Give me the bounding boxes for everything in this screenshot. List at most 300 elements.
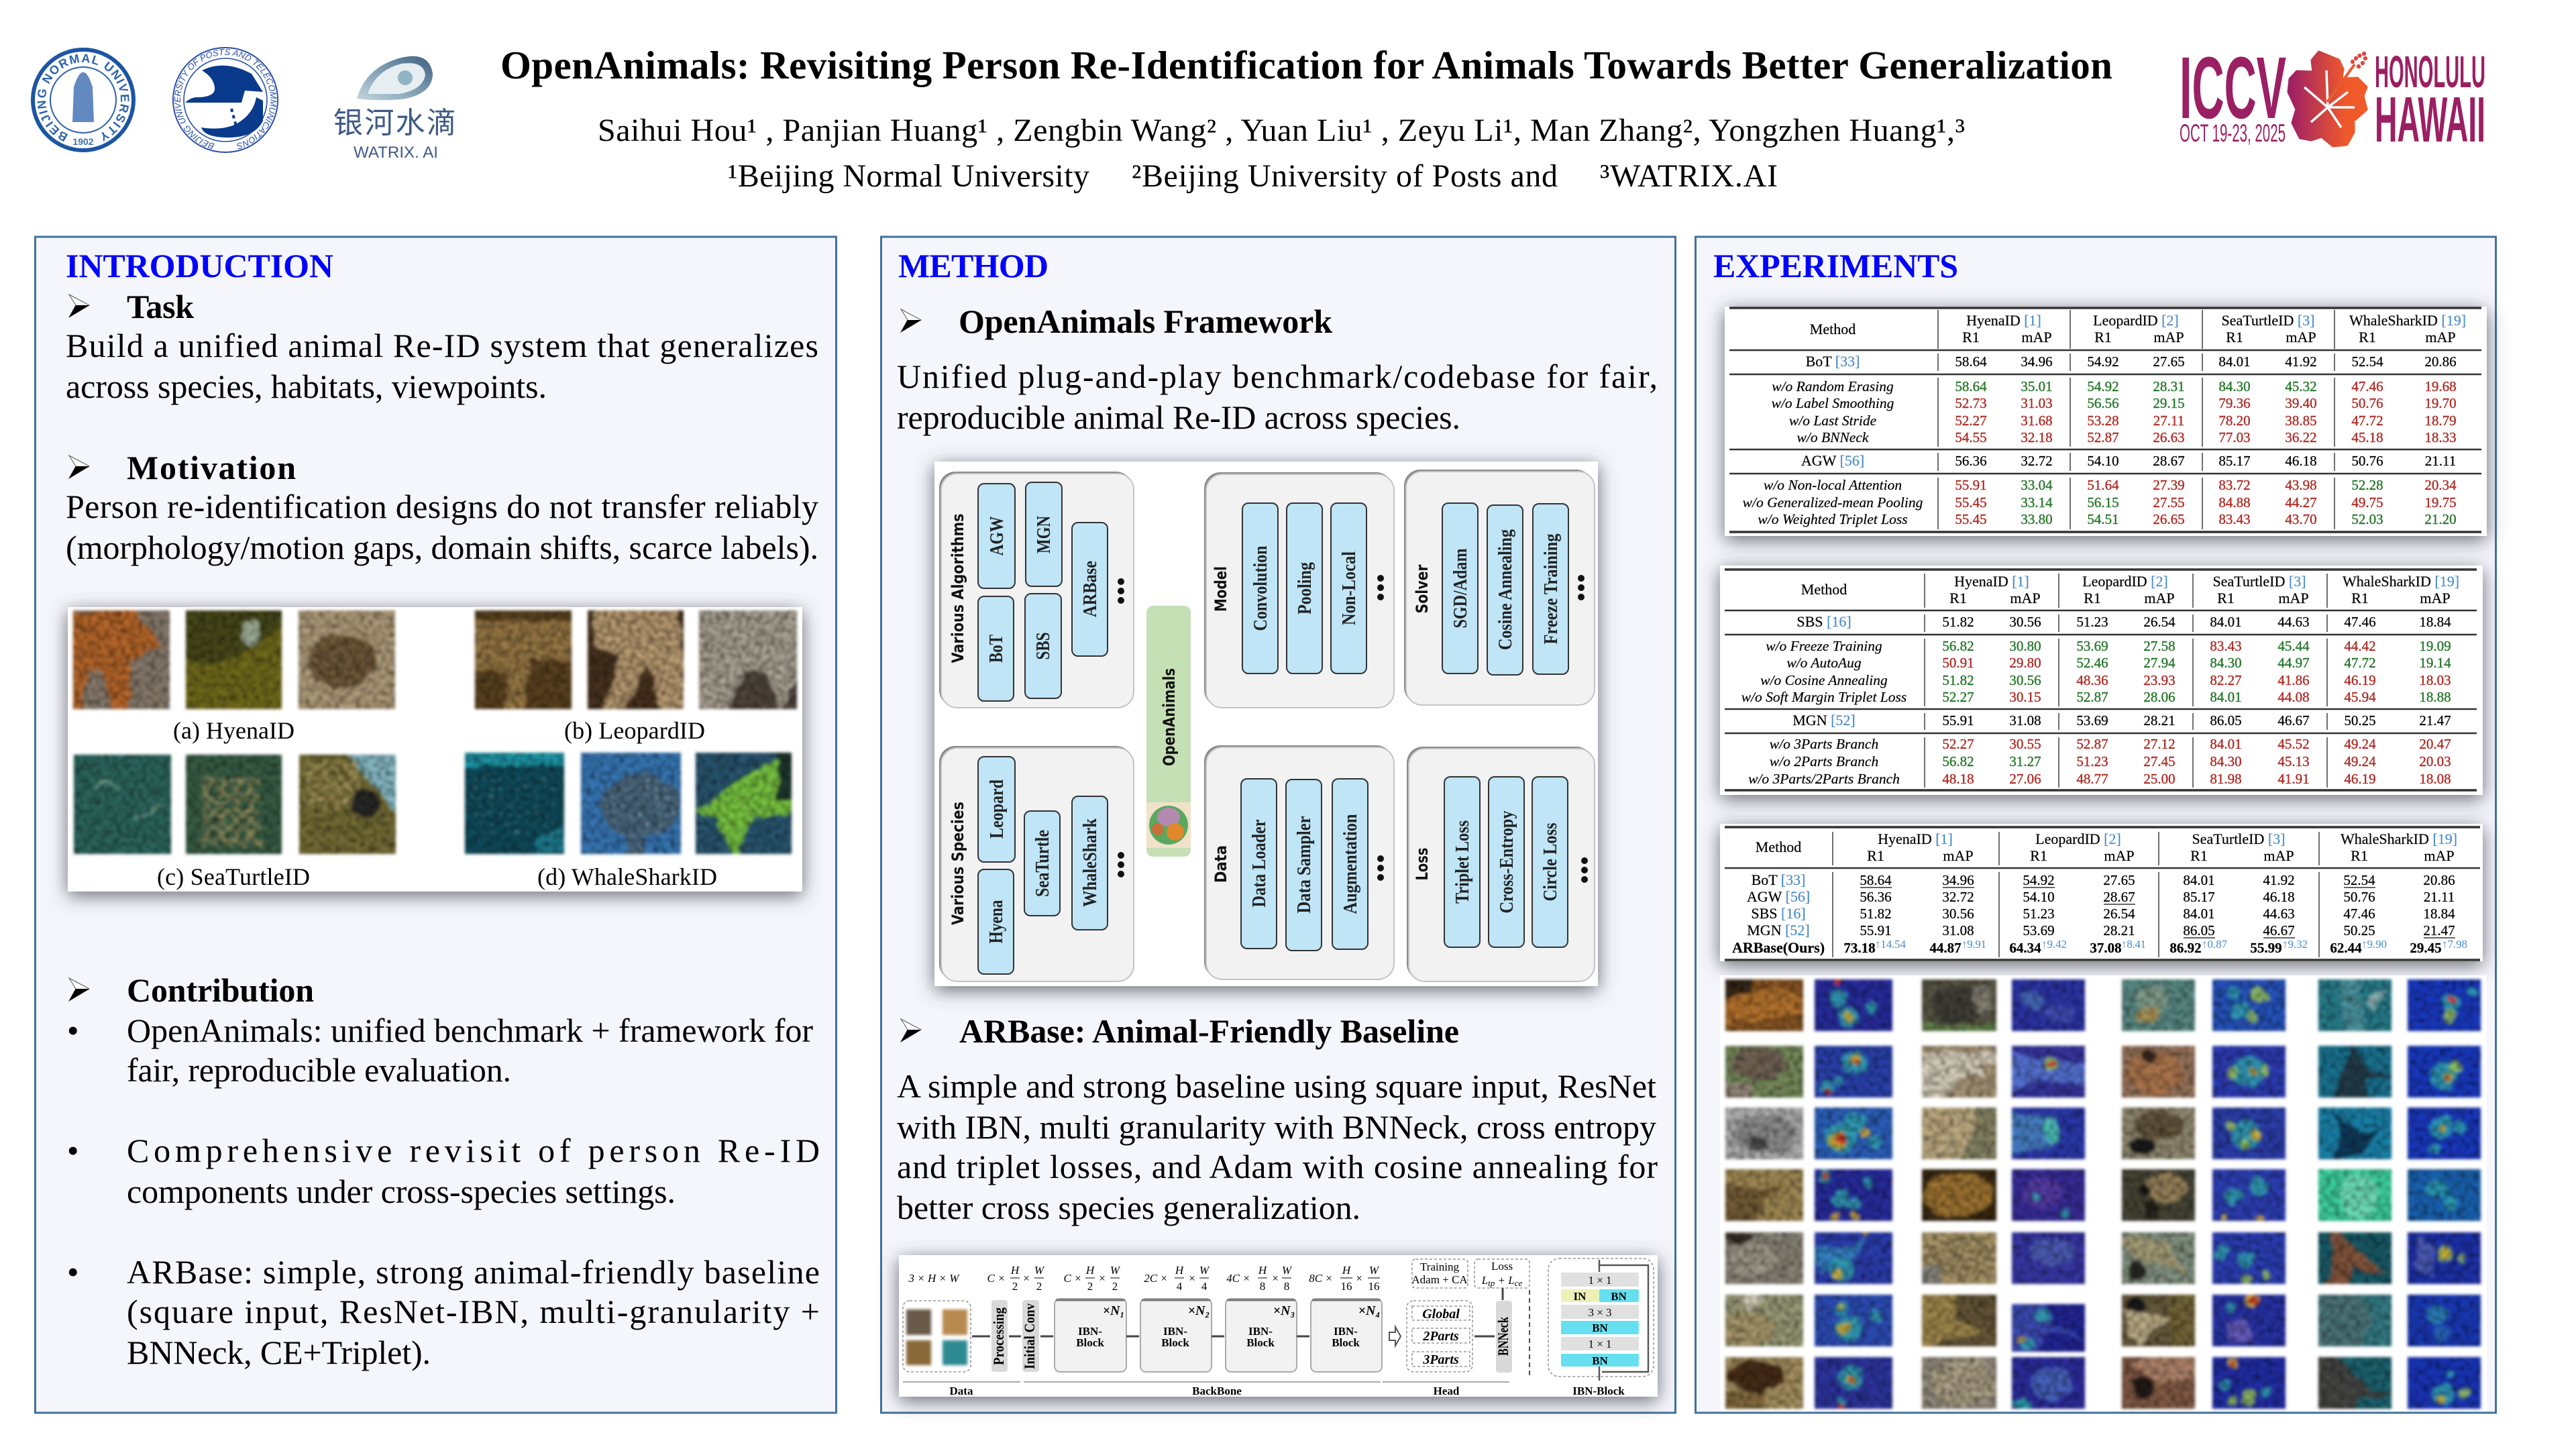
table: bot and agw ablation: 34.96 [2021, 354, 2053, 370]
training and loss boxes [1411, 1259, 1529, 1288]
table: bot and agw ablation: 55.91 [1955, 477, 1987, 493]
table: comparison with arbase: 73.18 [1843, 940, 1876, 956]
group: data: Data [1212, 845, 1230, 883]
table: sbs and mgn ablation: 49.24 [2344, 736, 2376, 752]
hyena samples [67, 604, 400, 714]
table: bot and agw ablation: 19.70 [2424, 395, 2457, 411]
table: sbs and mgn ablation: 53.69 [2076, 712, 2108, 729]
table: bot and agw ablation: 43.98 [2285, 477, 2317, 493]
subsection: contribution: BNNeck, CE+Triplet). [127, 1334, 431, 1371]
table: comparison with arbase [1720, 824, 2483, 961]
table: comparison with arbase: 46.67 [2263, 922, 2295, 938]
section labels: Head [1434, 1385, 1460, 1397]
table: bot and agw ablation: 52.54 [2351, 354, 2383, 370]
table: bot and agw ablation: 85.17 [2218, 453, 2251, 469]
table: bot and agw ablation: 35.01 [2021, 378, 2053, 394]
table: sbs and mgn ablation: 50.91 [1942, 655, 1974, 671]
table: sbs and mgn ablation: 30.15 [2009, 689, 2041, 705]
table: bot and agw ablation: BoT [33] [1806, 353, 1860, 370]
table: bot and agw ablation: HyenaID [1] [1966, 312, 2041, 329]
shape labels: 4 [1177, 1280, 1183, 1293]
table: bot and agw ablation: 45.18 [2351, 429, 2383, 445]
table: sbs and mgn ablation: 21.47 [2419, 712, 2451, 729]
table: sbs and mgn ablation: 46.19 [2344, 771, 2376, 787]
table: bot and agw ablation: 84.30 [2218, 378, 2251, 394]
subsection: arbase baseline [897, 1012, 1658, 1226]
subsection: framework: OpenAnimals Framework [959, 303, 1332, 340]
table: comparison with arbase: 51.82 [1860, 906, 1892, 922]
group: various species: WhaleShark [1080, 818, 1101, 907]
caption d: (d) WhaleSharkID [537, 863, 717, 890]
shape labels: H [1175, 1264, 1185, 1277]
table: bot and agw ablation: R1 [1962, 329, 1980, 345]
table: comparison with arbase: ↑0.87 [2202, 938, 2227, 951]
table: sbs and mgn ablation: 25.00 [2143, 771, 2176, 787]
shape labels: 8C × [1309, 1272, 1333, 1285]
table: sbs and mgn ablation: mAP [2278, 590, 2309, 606]
table: sbs and mgn ablation: 44.63 [2277, 614, 2310, 630]
table: sbs and mgn ablation: 47.72 [2344, 655, 2376, 671]
group: various species [939, 746, 1134, 981]
group: various algorithms: BoT [986, 635, 1007, 663]
table: comparison with arbase: R1 [2190, 847, 2208, 864]
table: comparison with arbase: ARBase(Ours) [1732, 939, 1825, 956]
head: 3Parts [1422, 1352, 1459, 1367]
table: comparison with arbase: ↑8.41 [2121, 938, 2146, 951]
subsection: motivation: Motivation [127, 449, 296, 486]
subsection: motivation [66, 449, 818, 566]
table: bot and agw ablation: R1 [2359, 329, 2376, 345]
table: bot and agw ablation: 54.92 [2087, 378, 2119, 394]
table: sbs and mgn ablation: WhaleSharkID [19] [2343, 573, 2459, 590]
table: comparison with arbase: ↑7.98 [2442, 938, 2467, 951]
panel: method [881, 237, 1676, 1413]
logo: Beijing University of Posts and Telecommunications: BEIJING UNIVERSITY OF POSTS AND TELECOMMUNICATIONS [174, 49, 276, 149]
heatmap row 4 [1720, 1164, 2486, 1226]
shape labels: H [1342, 1264, 1352, 1277]
heatmap row 1 [1720, 974, 2486, 1036]
shape labels: 2 [1036, 1280, 1042, 1293]
shape labels: × [1023, 1272, 1030, 1285]
table: comparison with arbase: 62.44 [2330, 940, 2362, 956]
ibn-block detail: BN [1592, 1354, 1609, 1367]
group: various algorithms [939, 472, 1134, 708]
table: bot and agw ablation: w/o BNNeck [1797, 429, 1869, 445]
caption b: (b) LeopardID [564, 717, 705, 744]
table: sbs and mgn ablation: 84.30 [2210, 655, 2242, 671]
table: bot and agw ablation: 52.27 [1955, 413, 1987, 429]
table: sbs and mgn ablation: 50.25 [2344, 712, 2376, 729]
table: bot and agw ablation: 47.46 [2351, 378, 2383, 394]
head: 2Parts [1422, 1329, 1459, 1344]
table: sbs and mgn ablation: 83.43 [2210, 638, 2242, 654]
affiliations: ¹Beijing Normal University [728, 158, 1089, 194]
group: various species: Leopard [987, 780, 1008, 839]
table: bot and agw ablation: WhaleSharkID [19] [2349, 312, 2466, 329]
heading: introduction: INTRODUCTION [66, 247, 333, 284]
heading: experiments: EXPERIMENTS [1713, 247, 1958, 284]
table: sbs and mgn ablation: w/o Soft Margin Triplet Loss [1741, 689, 1907, 705]
table: sbs and mgn ablation: 28.06 [2143, 689, 2176, 705]
subsection: framework: Unified plug-and-play benchmark/codebase for fair, [897, 358, 1658, 395]
table: bot and agw ablation: 45.32 [2285, 378, 2317, 394]
table: sbs and mgn ablation: 48.36 [2076, 672, 2108, 688]
shape labels: 2 [1012, 1280, 1018, 1293]
table: sbs and mgn ablation: 49.24 [2344, 753, 2376, 769]
table: bot and agw ablation: 32.72 [2021, 453, 2053, 469]
table: sbs and mgn ablation: 45.44 [2277, 638, 2310, 654]
table: comparison with arbase: R1 [2351, 847, 2368, 864]
subsection: motivation: (morphology/motion gaps, domain shifts, scarce labels). [66, 529, 818, 566]
table: comparison with arbase: 28.21 [2103, 922, 2135, 938]
table: comparison with arbase: 44.63 [2263, 906, 2295, 922]
table: comparison with arbase: 85.17 [2183, 889, 2215, 905]
group: various algorithms: AGW [987, 517, 1008, 555]
ibn blocks: IBN- [1248, 1325, 1273, 1338]
head [1407, 1301, 1472, 1372]
shape labels: C × [987, 1272, 1006, 1285]
table: bot and agw ablation: 36.22 [2285, 429, 2317, 445]
whale shark samples [460, 746, 797, 860]
shape labels: 8 [1260, 1280, 1265, 1293]
table: bot and agw ablation: w/o Non-local Attention [1764, 477, 1902, 493]
table: sbs and mgn ablation: 27.12 [2143, 736, 2176, 752]
ibn blocks: Block [1246, 1336, 1275, 1349]
table: bot and agw ablation: LeopardID [2] [2093, 312, 2179, 329]
shape labels: W [1369, 1264, 1380, 1277]
group: data: Augmentation [1340, 814, 1361, 914]
table: sbs and mgn ablation: mAP [2144, 590, 2175, 606]
table: bot and agw ablation: 47.72 [2351, 413, 2383, 429]
table: bot and agw ablation: 18.33 [2424, 429, 2457, 445]
training and loss boxes: L [1482, 1274, 1488, 1287]
table: bot and agw ablation: Method [1810, 321, 1856, 337]
table: comparison with arbase: ↑9.90 [2361, 938, 2387, 951]
table: comparison with arbase: 53.69 [2023, 922, 2055, 938]
table: bot and agw ablation: SeaTurtleID [3] [2221, 312, 2315, 329]
table: sbs and mgn ablation: R1 [2217, 590, 2235, 606]
group: solver: Solver [1413, 564, 1432, 613]
table: sbs and mgn ablation: mAP [2010, 590, 2041, 606]
table: sbs and mgn ablation [1720, 566, 2483, 795]
table: sbs and mgn ablation: 51.23 [2076, 753, 2108, 769]
group: data [1204, 745, 1394, 979]
table: bot and agw ablation: 84.01 [2218, 354, 2251, 370]
table: sbs and mgn ablation: 47.46 [2344, 614, 2376, 630]
table: comparison with arbase: HyenaID [1] [1878, 830, 1953, 847]
subsection: arbase baseline: A simple and strong baseline using square input, ResNet [897, 1067, 1656, 1105]
table: comparison with arbase: 86.05 [2183, 922, 2215, 938]
table: bot and agw ablation: 56.56 [2087, 395, 2119, 411]
table: bot and agw ablation: 84.88 [2218, 494, 2251, 511]
training and loss boxes: + L [1495, 1274, 1515, 1287]
subsection: contribution: Comprehensive revisit of person Re-ID [127, 1132, 820, 1169]
table: bot and agw ablation: R1 [2094, 329, 2112, 345]
logo: Beijing Normal University: BEIJING NORMAL UNIVERSITY [38, 54, 129, 142]
table: sbs and mgn ablation: 84.01 [2210, 689, 2242, 705]
subsection: arbase baseline: with IBN, multi granularity with BNNeck, cross entropy [897, 1108, 1656, 1146]
table: sbs and mgn ablation: 26.54 [2143, 614, 2176, 630]
table: bot and agw ablation: 32.18 [2021, 429, 2053, 445]
bnneck block: BNNeck [1495, 1316, 1511, 1356]
table: comparison with arbase: 54.10 [2023, 889, 2055, 905]
table: bot and agw ablation: 21.20 [2424, 511, 2457, 527]
ibn-block detail [1548, 1258, 1654, 1381]
table: bot and agw ablation: 78.20 [2218, 413, 2251, 429]
table: bot and agw ablation: 49.75 [2351, 494, 2383, 511]
table: bot and agw ablation: 31.68 [2021, 413, 2053, 429]
table: bot and agw ablation: 20.34 [2424, 477, 2457, 493]
group: data: Data Sampler [1294, 816, 1315, 914]
section labels: Data [950, 1385, 973, 1397]
table: comparison with arbase: BoT [33] [1752, 871, 1805, 888]
table: comparison with arbase: 56.36 [1860, 889, 1892, 905]
ibn-block detail: 1 × 1 [1588, 1274, 1612, 1287]
sea turtle samples [67, 748, 401, 859]
table: sbs and mgn ablation: 55.91 [1942, 712, 1974, 729]
table: sbs and mgn ablation: 52.46 [2076, 655, 2108, 671]
shape labels: 4 [1201, 1280, 1208, 1293]
shape labels: 16 [1368, 1280, 1379, 1293]
subsection: contribution: ARBase: simple, strong animal-friendly baseline [127, 1253, 820, 1291]
table: sbs and mgn ablation: MGN [52] [1792, 712, 1856, 729]
table: bot and agw ablation: 79.36 [2218, 395, 2251, 411]
icon: animal mascot [1146, 802, 1191, 848]
table: sbs and mgn ablation: 51.82 [1942, 672, 1974, 688]
subsection: contribution: OpenAnimals: unified benchmark + framework for [127, 1012, 813, 1049]
table: bot and agw ablation: 56.15 [2087, 494, 2119, 511]
ibn-block detail: 1 × 1 [1588, 1338, 1612, 1350]
processing blocks: Processing [990, 1307, 1007, 1365]
caption a: (a) HyenaID [173, 717, 294, 744]
table: comparison with arbase: 51.23 [2023, 906, 2055, 922]
table: comparison with arbase: ↑14.54 [1875, 938, 1907, 951]
table: comparison with arbase: 86.92 [2169, 940, 2202, 956]
table: comparison with arbase: 41.92 [2263, 872, 2295, 888]
group: model: Convolution [1250, 545, 1271, 631]
table: bot and agw ablation: 53.28 [2087, 413, 2119, 429]
table: sbs and mgn ablation: 30.80 [2009, 638, 2041, 654]
table: sbs and mgn ablation: SeaTurtleID [3] [2212, 573, 2306, 590]
table: bot and agw ablation: 54.92 [2087, 354, 2119, 370]
table: bot and agw ablation: 54.55 [1955, 429, 1987, 445]
table: sbs and mgn ablation: 20.03 [2419, 753, 2451, 769]
table: comparison with arbase: 47.46 [2343, 906, 2375, 922]
subsection: task: Task [127, 288, 194, 325]
shape labels: × [1189, 1272, 1195, 1285]
shape labels: 8 [1284, 1280, 1289, 1293]
table: sbs and mgn ablation: 27.58 [2143, 638, 2176, 654]
table: comparison with arbase: 55.91 [1860, 922, 1892, 938]
table: comparison with arbase: 27.65 [2103, 872, 2135, 888]
figure: arbase architecture [899, 1255, 1658, 1397]
ibn blocks: IBN- [1163, 1325, 1187, 1338]
table: sbs and mgn ablation: mAP [2420, 590, 2451, 606]
table: sbs and mgn ablation: 45.13 [2277, 753, 2310, 769]
group: various algorithms: SBS [1033, 632, 1054, 660]
table: bot and agw ablation: 28.31 [2153, 378, 2185, 394]
table: bot and agw ablation: 83.72 [2218, 477, 2251, 493]
table: bot and agw ablation: 27.65 [2153, 354, 2185, 370]
shape labels: H [1010, 1264, 1020, 1277]
table: bot and agw ablation: AGW [56] [1801, 452, 1864, 469]
table: comparison with arbase: 58.64 [1860, 872, 1892, 888]
group: model: Model [1212, 566, 1230, 612]
table: comparison with arbase: 21.11 [2424, 889, 2455, 905]
table: sbs and mgn ablation: 46.67 [2277, 712, 2310, 729]
training and loss boxes: Adam + CA [1411, 1273, 1468, 1286]
table: sbs and mgn ablation: 30.56 [2009, 614, 2041, 630]
group: various species: SeaTurtle [1032, 830, 1053, 897]
ibn-block detail: 3 × 3 [1588, 1306, 1612, 1319]
group: loss: Circle Loss [1540, 822, 1561, 902]
table: comparison with arbase: 20.86 [2423, 872, 2455, 888]
table: sbs and mgn ablation: 86.05 [2210, 712, 2242, 729]
table: comparison with arbase: 26.54 [2103, 906, 2135, 922]
table: comparison with arbase: 84.01 [2183, 906, 2215, 922]
subsection: task [66, 288, 818, 405]
table: sbs and mgn ablation: Method [1801, 581, 1847, 598]
table: comparison with arbase: mAP [2263, 847, 2294, 864]
training and loss boxes: Loss [1491, 1260, 1513, 1273]
table: sbs and mgn ablation: 52.87 [2076, 689, 2108, 705]
ibn blocks: Block [1076, 1336, 1104, 1349]
table: sbs and mgn ablation: 19.09 [2419, 638, 2451, 654]
table: bot and agw ablation: 21.11 [2425, 453, 2456, 469]
table: comparison with arbase: 84.01 [2183, 872, 2215, 888]
table: sbs and mgn ablation: 19.14 [2419, 655, 2451, 671]
logo: ICCV 2025 Honolulu Hawaii [2180, 38, 2485, 156]
table: sbs and mgn ablation: 46.19 [2344, 672, 2376, 688]
table: sbs and mgn ablation: 28.21 [2143, 712, 2176, 729]
table: bot and agw ablation: 52.03 [2351, 511, 2383, 527]
table: comparison with arbase: R1 [1867, 847, 1884, 864]
table: comparison with arbase: R1 [2030, 847, 2047, 864]
table: sbs and mgn ablation: 48.77 [2076, 771, 2108, 787]
table: sbs and mgn ablation: 52.27 [1942, 689, 1974, 705]
table: comparison with arbase: AGW [56] [1747, 888, 1810, 905]
shape labels: W [1110, 1264, 1121, 1277]
subsection: contribution: components under cross-species settings. [127, 1173, 676, 1210]
table: sbs and mgn ablation: 84.01 [2210, 736, 2242, 752]
table: sbs and mgn ablation: 84.01 [2210, 614, 2242, 630]
table: sbs and mgn ablation: HyenaID [1] [1954, 573, 2029, 590]
figure: dataset samples [67, 604, 802, 892]
table: comparison with arbase: 37.08 [2090, 940, 2122, 956]
arrows: pipeline [972, 1288, 1503, 1336]
head: Global [1422, 1307, 1460, 1322]
table: bot and agw ablation: 55.45 [1955, 511, 1987, 527]
table: bot and agw ablation: 27.55 [2153, 494, 2185, 511]
table: bot and agw ablation: 18.79 [2424, 413, 2457, 429]
table: comparison with arbase: MGN [52] [1747, 922, 1810, 938]
table: sbs and mgn ablation: 27.94 [2143, 655, 2176, 671]
table: bot and agw ablation: 39.40 [2285, 395, 2317, 411]
subsection: contribution: • [67, 1253, 79, 1291]
subsection: framework [897, 303, 1658, 436]
table: sbs and mgn ablation: SBS [16] [1796, 613, 1851, 630]
table: sbs and mgn ablation: R1 [2351, 590, 2369, 606]
table: sbs and mgn ablation: 45.52 [2277, 736, 2310, 752]
table: comparison with arbase: ↑9.91 [1962, 938, 1986, 951]
table: bot and agw ablation: 58.64 [1955, 354, 1987, 370]
table: bot and agw ablation: w/o Random Erasing [1772, 378, 1894, 394]
table: bot and agw ablation: mAP [2286, 329, 2316, 345]
authors: Saihui Hou¹ , Panjian Huang¹ , Zengbin Wang² , Yuan Liu¹ , Zeyu Li¹, Man Zhang², Yongzhen Huang¹,³ [598, 113, 1965, 148]
table: sbs and mgn ablation: 44.08 [2277, 689, 2310, 705]
table: sbs and mgn ablation: w/o 3Parts Branch [1770, 736, 1878, 752]
table: sbs and mgn ablation: 23.93 [2143, 672, 2176, 688]
table: comparison with arbase: 31.08 [1942, 922, 1974, 938]
subsection: task: Build a unified animal Re-ID system that generalizes [66, 327, 818, 364]
table: sbs and mgn ablation: 51.82 [1942, 614, 1974, 630]
table: comparison with arbase: 28.67 [2103, 889, 2135, 905]
table: sbs and mgn ablation: 44.42 [2344, 638, 2376, 654]
ibn blocks: IBN- [1078, 1325, 1102, 1338]
group: various species: Hyena [986, 900, 1007, 943]
table: comparison with arbase: Method [1756, 839, 1801, 855]
processing blocks [990, 1300, 1039, 1372]
table: comparison with arbase: ↑9.32 [2282, 938, 2308, 951]
table: comparison with arbase: 32.72 [1942, 889, 1974, 905]
table: sbs and mgn ablation: R1 [1949, 590, 1967, 606]
subsection: motivation: Person re-identification designs do not transfer reliably [66, 488, 818, 525]
table: bot and agw ablation: 19.75 [2424, 494, 2457, 511]
figure: attention heatmaps [1716, 974, 2487, 1414]
shape labels: 16 [1340, 1280, 1352, 1293]
table: comparison with arbase: mAP [2104, 847, 2135, 864]
table: sbs and mgn ablation: 31.27 [2009, 753, 2041, 769]
heading: method: METHOD [898, 247, 1049, 284]
ibn blocks: ×N₄ [1358, 1303, 1380, 1318]
group: loss: Loss [1413, 848, 1432, 880]
subsection: contribution: fair, reproducible evaluation. [127, 1051, 511, 1089]
group: loss [1407, 747, 1595, 981]
table: bot and agw ablation: 54.51 [2087, 511, 2119, 527]
table: comparison with arbase: 30.56 [1942, 906, 1974, 922]
table: comparison with arbase: 50.25 [2343, 922, 2375, 938]
ibn blocks: ×N₁ [1103, 1303, 1124, 1318]
table: bot and agw ablation: w/o Generalized-mean Pooling [1743, 494, 1923, 511]
logo: WATRIX.AI: 银河水滴 [333, 107, 456, 140]
table: comparison with arbase: 29.45 [2410, 940, 2442, 956]
table: comparison with arbase: 55.99 [2250, 940, 2282, 956]
group: various algorithms: MGN [1034, 516, 1055, 553]
panel: introduction [35, 237, 836, 1413]
table: sbs and mgn ablation: 30.56 [2009, 672, 2041, 688]
table: comparison with arbase: SeaTurtleID [3] [2192, 830, 2286, 847]
group: model: Pooling [1295, 562, 1316, 614]
table: comparison with arbase: SBS [16] [1751, 905, 1806, 922]
ibn blocks: Block [1332, 1336, 1360, 1349]
subsection: contribution [67, 971, 820, 1371]
table: bot and agw ablation: w/o Label Smoothing [1772, 395, 1894, 411]
group: solver: Freeze Training [1541, 534, 1562, 644]
heatmap row 3 [1720, 1102, 2486, 1165]
table: sbs and mgn ablation: 41.91 [2277, 771, 2310, 787]
table: bot and agw ablation: 27.11 [2153, 413, 2184, 429]
table: bot and agw ablation: 41.92 [2285, 354, 2317, 370]
table: sbs and mgn ablation: LeopardID [2] [2082, 573, 2168, 590]
table: bot and agw ablation: 33.80 [2021, 511, 2053, 527]
table: sbs and mgn ablation: 31.08 [2009, 712, 2041, 729]
table: bot and agw ablation: 58.64 [1955, 378, 1987, 394]
logo: ICCV 2025 Honolulu Hawaii: OCT 19-23, 2025 [2180, 119, 2286, 147]
table: sbs and mgn ablation: w/o 2Parts Branch [1770, 753, 1878, 769]
table: bot and agw ablation: 50.76 [2351, 395, 2383, 411]
ibn-block detail: IN [1574, 1290, 1587, 1303]
shape labels: × [1356, 1272, 1362, 1285]
